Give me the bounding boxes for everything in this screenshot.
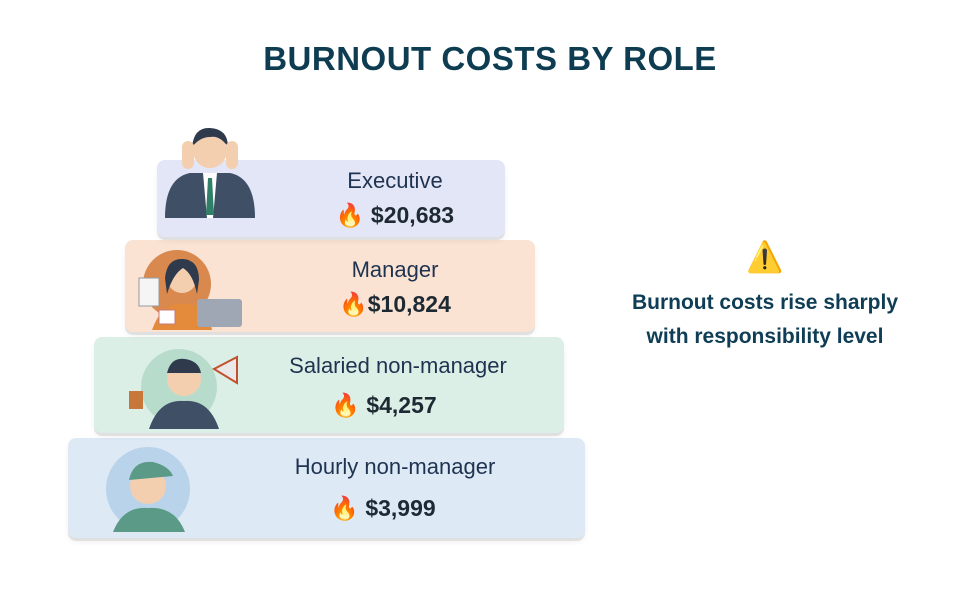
- icon: executive: [165, 128, 255, 218]
- text: name: Salaried non-manager: [289, 353, 507, 378]
- text: cost: 🔥$10,824: [339, 291, 451, 317]
- text: name: Executive: [347, 168, 443, 193]
- callout: Burnout costs rise sharply: [632, 291, 898, 314]
- icon: manager: [138, 250, 242, 330]
- panel: hourly non-manager: [68, 438, 585, 538]
- panel: executive: [157, 160, 505, 237]
- icon: hourly worker: [106, 447, 190, 532]
- panel: manager: [125, 240, 535, 332]
- panel: salaried non-manager: [94, 337, 564, 433]
- text: name: Manager: [352, 257, 438, 282]
- icon: warning: ⚠️: [746, 241, 784, 274]
- callout: [632, 240, 898, 348]
- callout: with responsibility level: [647, 325, 883, 348]
- text: name: Hourly non-manager: [295, 454, 495, 479]
- text: cost: 🔥 $4,257: [331, 392, 437, 418]
- title: BURNOUT COSTS BY ROLE: [263, 40, 717, 77]
- text: cost: 🔥 $20,683: [336, 202, 454, 228]
- text: cost: 🔥 $3,999: [330, 495, 436, 521]
- icon: salaried worker: [129, 349, 238, 429]
